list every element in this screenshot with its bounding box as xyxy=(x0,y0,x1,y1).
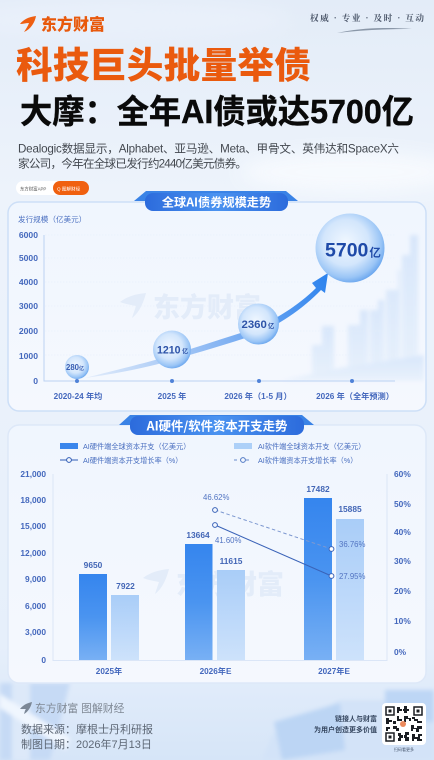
legend: AI硬件端全球资本开支（亿美元） xyxy=(83,442,190,451)
growth labels: 46.62% xyxy=(203,493,230,502)
x labels: 2025年 xyxy=(96,666,122,676)
left axis: 6,000 xyxy=(25,601,46,611)
right axis: 40% xyxy=(394,527,411,537)
bar values: 11615 xyxy=(220,556,243,566)
panel: capex trend xyxy=(8,425,426,683)
x labels: 2027年E xyxy=(318,666,350,676)
left axis: 18,000 xyxy=(20,495,46,505)
app search pill xyxy=(16,181,89,195)
source text: 数据来源：摩根士丹利研报 xyxy=(21,722,153,736)
y axis: 3000 xyxy=(19,301,38,311)
y axis: 6000 xyxy=(19,230,38,240)
right axis: 20% xyxy=(394,586,411,596)
y axis title: 发行规模（亿美元） xyxy=(18,214,86,224)
heading: capex trend: AI硬件/软件资本开支走势 xyxy=(146,416,288,434)
app search pill: Q 图解财经 xyxy=(57,186,81,192)
bar values: 7922 xyxy=(116,581,135,591)
intro text: Dealogic数据显示，Alphabet、亚马逊、Meta、甲骨文、英伟达和SpaceX六 xyxy=(18,142,399,156)
bar values: 15885 xyxy=(338,504,362,514)
y axis: 0 xyxy=(33,376,38,386)
bubble 2360: 2360亿 xyxy=(242,319,275,331)
x labels xyxy=(54,391,394,401)
subtitle: 大摩：全年AI债或达5700亿 xyxy=(20,93,414,130)
bubble 1210: 1210亿 xyxy=(157,344,188,356)
bar values: 9650 xyxy=(84,560,103,570)
legend xyxy=(60,442,365,465)
QR code xyxy=(382,703,426,745)
plot frame xyxy=(53,474,387,660)
title: 科技巨头批量举债 xyxy=(16,36,311,89)
footer slogan xyxy=(314,714,377,734)
QR caption: 扫码看更多 xyxy=(394,746,414,752)
left axis: 9,000 xyxy=(25,574,46,584)
bar values: 13664 xyxy=(186,530,210,540)
left axis: 3,000 xyxy=(25,627,46,637)
y axis xyxy=(19,230,38,386)
app search pill: 东方财富APP xyxy=(20,186,46,192)
left axis: 21,000 xyxy=(20,469,46,479)
slogan: 权威 · 专业 · 及时 · 互动 xyxy=(310,12,424,24)
brand logo: 东方财富 xyxy=(41,11,105,35)
x labels: 2026 年（全年预测） xyxy=(316,391,394,401)
panel: bond trend xyxy=(8,202,426,411)
bars xyxy=(79,498,364,660)
bubble 280 xyxy=(65,355,89,379)
legend: AI硬件端资本开支增长率（%） xyxy=(83,456,182,465)
growth arrow xyxy=(85,273,328,378)
right axis: 30% xyxy=(394,556,411,566)
x labels: 2026 年（1-5 月） xyxy=(224,391,292,401)
growth lines xyxy=(213,508,334,578)
source text xyxy=(21,722,153,751)
footer slogan: 为用户创造更多价值 xyxy=(314,725,377,734)
watermark: 东方财富 xyxy=(176,563,284,602)
city skyline xyxy=(280,235,424,381)
heading: capex trend xyxy=(119,415,314,435)
bubble 280: 280亿 xyxy=(66,363,84,372)
left axis xyxy=(20,469,46,665)
footer brand: 东方财富 图解财经 xyxy=(35,701,125,715)
right axis: 0% xyxy=(394,647,407,657)
bubble 5700: 5700亿 xyxy=(325,240,381,262)
source text: 制图日期：2026年7月13日 xyxy=(21,737,152,751)
x labels xyxy=(96,666,350,676)
footer slogan: 链接人与财富 xyxy=(335,714,377,723)
legend: AI软件端资本开支增长率（%） xyxy=(258,456,357,465)
bar values xyxy=(84,484,362,591)
watermark: 东方财富 xyxy=(153,286,261,325)
y axis: 5000 xyxy=(19,253,38,263)
axis dots xyxy=(75,379,354,383)
left axis: 15,000 xyxy=(20,521,46,531)
x labels: 2025 年 xyxy=(158,391,186,401)
right axis xyxy=(394,469,411,657)
growth labels: 41.60% xyxy=(215,536,242,545)
heading: bond trend xyxy=(134,191,298,211)
bubble 1210 xyxy=(153,330,191,368)
right axis: 60% xyxy=(394,469,411,479)
right axis: 10% xyxy=(394,616,411,626)
growth labels xyxy=(203,493,366,581)
slogan xyxy=(310,12,424,33)
y axis: 4000 xyxy=(19,277,38,287)
left axis: 12,000 xyxy=(20,548,46,558)
heading: bond trend: 全球AI债券规模走势 xyxy=(162,192,271,210)
bar values: 17482 xyxy=(306,484,330,494)
growth labels: 36.76% xyxy=(339,540,366,549)
intro text xyxy=(18,142,399,170)
y axis: 2000 xyxy=(19,326,38,336)
bubble 2360 xyxy=(238,304,279,344)
growth labels: 27.95% xyxy=(339,572,366,581)
gridlines xyxy=(45,235,395,355)
icon: flame xyxy=(20,16,36,32)
left axis: 0 xyxy=(41,655,46,665)
right axis: 50% xyxy=(394,499,411,509)
legend: AI软件端全球资本开支（亿美元） xyxy=(258,442,365,451)
y axis: 1000 xyxy=(19,351,38,361)
intro text: 家公司，今年在全球已发行约2440亿美元债券。 xyxy=(18,156,247,170)
bubble 5700 xyxy=(316,214,384,282)
x labels: 2026年E xyxy=(200,666,232,676)
x labels: 2020-24 年均 xyxy=(54,391,102,401)
